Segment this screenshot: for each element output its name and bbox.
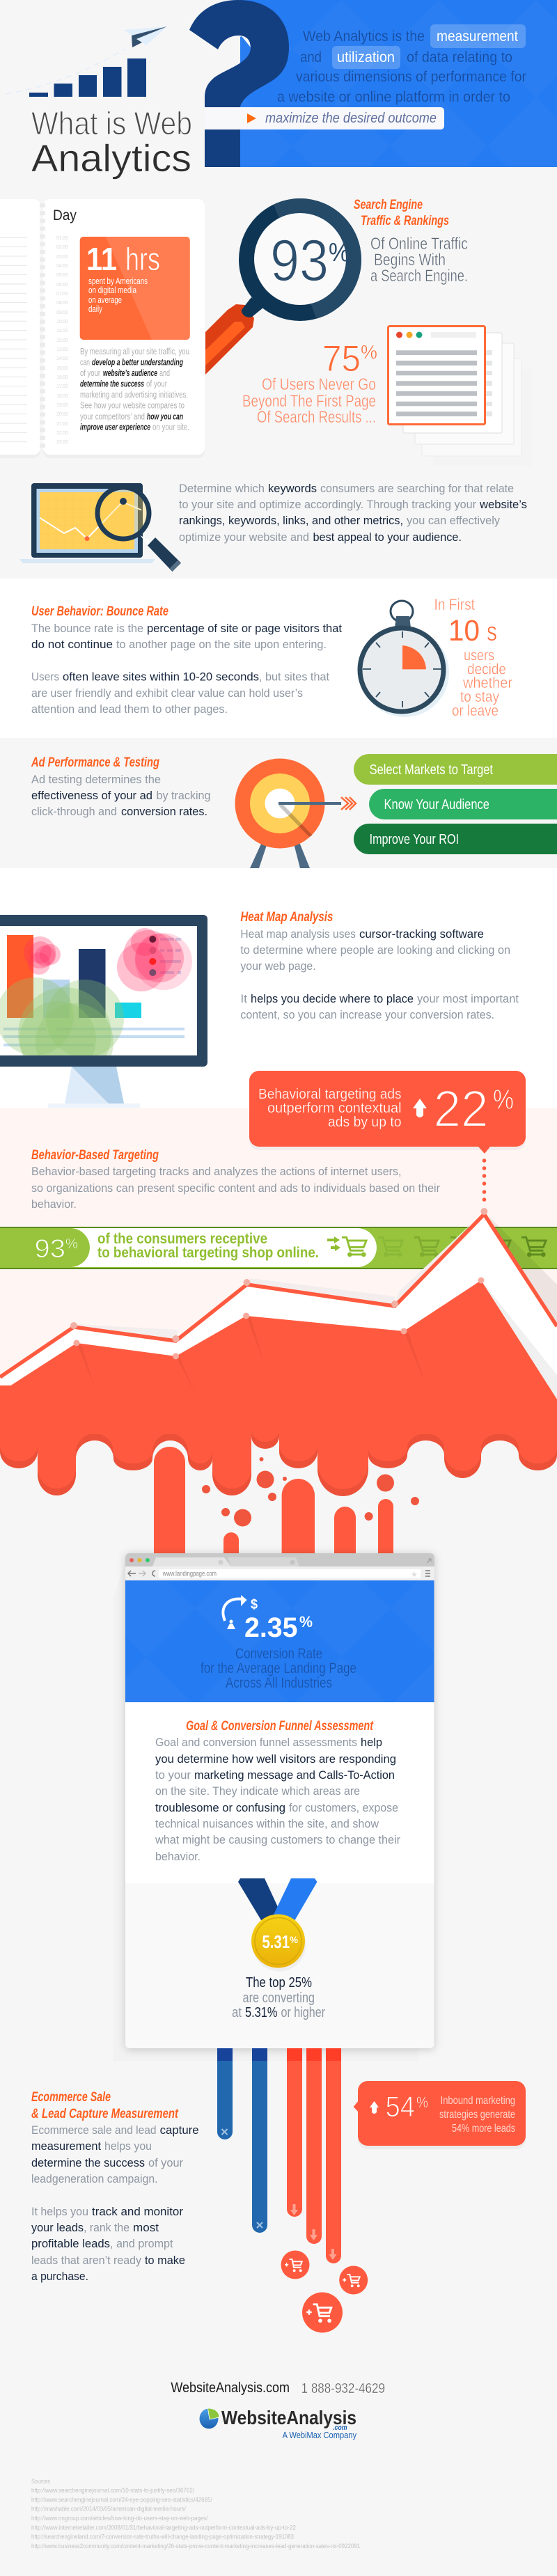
text: top 25 percent: 5.31% (245, 2005, 278, 2020)
callout: maximize the desired outcome (205, 107, 444, 129)
streams: blue lost leads (217, 2048, 267, 2233)
text: keywords: you can effectively (407, 514, 500, 527)
heading: search engine traffic and rankings: Search Engine (354, 198, 423, 212)
text block: measuring traffic: See how your website compares to (80, 401, 185, 411)
icon: cart with arrows (327, 1236, 366, 1257)
hour labels: 04:00 (56, 262, 68, 269)
stat: 75 percent: Of Users Never Go (262, 375, 376, 394)
heading: behavior targeting: Behavior-Based Targeting (31, 1148, 159, 1163)
icons: cart circles (281, 2250, 368, 2332)
browser chrome: www.landingpage.com (162, 1571, 217, 1578)
text block: measuring traffic: website’s audience (103, 368, 157, 378)
text block: measuring traffic: your competitors’ and (80, 411, 145, 421)
text block: measuring traffic: how you can (147, 411, 183, 421)
text block: measuring traffic (80, 347, 189, 432)
heading: search engine traffic and rankings: Traffic & Rankings (361, 214, 449, 228)
hour labels: 12:00 (56, 337, 68, 343)
logo: A WebiMax Company (283, 2430, 356, 2440)
chart drip shade (0, 1392, 557, 1496)
text: of online traffic: a Search Engine. (370, 267, 468, 285)
text: ad testing: Ad testing determines the (31, 773, 161, 786)
stat: 75 percent: Of Search Results ... (257, 408, 376, 427)
text block: measuring traffic: marketing and advertising initiatives. (80, 390, 188, 400)
panel: daily calendar (0, 199, 205, 458)
pill: select markets (354, 754, 557, 785)
definition text (277, 24, 526, 105)
panel: search engine traffic (205, 195, 533, 466)
definition text: utilization (337, 49, 395, 65)
stat: first 10 seconds: In First (434, 595, 476, 613)
icon: laptop with magnifier (19, 483, 181, 572)
heading: ad performance: Ad Performance & Testing (31, 755, 159, 770)
definition text: of data relating to (407, 49, 512, 65)
stat: first 10 seconds: to stay (460, 688, 499, 705)
text: conversion rate: Across All Industries (226, 1675, 332, 1691)
callout: behavioral targeting 22 percent: ads by up to (328, 1115, 401, 1130)
text: funnel assessment: you determine how well visitors are responding (155, 1752, 396, 1766)
pill: know your audience (369, 789, 557, 819)
text: ad testing: conversion rates. (121, 805, 207, 818)
hour labels: 07:00 (56, 290, 68, 297)
text: ecommerce: a purchase. (31, 2270, 88, 2283)
text: behavior targeting: Behavior-based targeting tracks and analyzes the actions of internet users, (31, 1165, 401, 1178)
logo: WebsiteAnalysis (221, 2407, 356, 2428)
sources: http://www.searchenginejournal.com/10-stats-to-justify-seo/36762/ (31, 2487, 194, 2495)
browser chrome: ★ (411, 1571, 418, 1579)
callout: behavioral targeting 22 percent: % (493, 1085, 514, 1115)
text: ecommerce: leads that aren’t ready (31, 2254, 141, 2267)
calendar right page (42, 199, 205, 458)
orange stat card: 11 hrs: hrs (125, 241, 160, 277)
icon: conversion arrow (223, 1595, 258, 1629)
text: ecommerce: It helps you (31, 2205, 88, 2218)
stat: 2.35 percent: % (299, 1613, 313, 1631)
text: bounce rate: The bounce rate is the (31, 622, 143, 635)
stat: first 10 seconds: s (487, 618, 497, 647)
dotted connector (483, 1159, 486, 1202)
banner: 93 percent of consumers: % (65, 1236, 78, 1252)
icon: medal (238, 1878, 317, 1972)
text: of online traffic: Begins With (374, 251, 446, 269)
text: conversion rate (201, 1646, 356, 1691)
hour labels: 19:00 (56, 402, 68, 408)
sources: http://www.searchenginejournal.com/24-eye-popping-seo-statistics/42665/ (31, 2496, 212, 2504)
callout: behavioral targeting 22 percent: 22 (433, 1080, 489, 1138)
sources: http://www.internetretailer.com/2008/01/31/behavioral-targeting-ads-outperform-contextual-ads-by-up-to-22 (31, 2524, 296, 2531)
text: funnel assessment: help (361, 1736, 382, 1749)
callout: behavioral targeting 22 percent: Behavioral targeting ads (258, 1087, 401, 1102)
orange stat card: 11 hrs: daily (88, 304, 103, 314)
text block: measuring traffic: develop a better understanding (92, 357, 183, 367)
text: top 25 percent: The top 25% (246, 1975, 312, 1990)
callout: inbound marketing 54 percent: 54 (386, 2090, 415, 2123)
panel: browser card (113, 1553, 434, 2061)
hour labels: 11:00 (56, 327, 68, 333)
title (31, 105, 192, 180)
hour labels: 10:00 (56, 318, 68, 324)
text: heat map: your most important (417, 992, 519, 1005)
sources: http://www.nngroup.com/articles/how-long-do-users-stay-on-web-pages/ (31, 2515, 208, 2522)
landing page blue panel (125, 1580, 434, 1702)
text: ad testing: by tracking (156, 789, 210, 802)
text block: measuring traffic: on your site. (152, 423, 189, 432)
icon: target with arrow (235, 759, 356, 868)
stat: 75 percent: 75 (322, 338, 361, 379)
callout: inbound marketing 54 percent: strategies generate (439, 2109, 515, 2121)
icon: magnifying glass (205, 195, 369, 375)
text: ecommerce: Ecommerce sale and lead (31, 2123, 156, 2137)
sources: Sources (31, 2478, 50, 2485)
chart shadows (74, 1215, 557, 1341)
chart red area (0, 1280, 557, 1434)
icon: stopwatch (360, 601, 449, 717)
icon: rising bar chart and paper plane (6, 26, 167, 97)
white content area (125, 1702, 434, 2048)
icons: faded carts (378, 1237, 546, 1257)
text: bounce rate: , but sites that (259, 670, 329, 684)
text: ecommerce: helps you (104, 2139, 152, 2153)
text: bounce rate: Users (31, 670, 59, 684)
text: top 25 percent: or higher (281, 2005, 325, 2020)
calendar right page: Day (53, 207, 77, 223)
text: ecommerce: leadgeneration campaign. (31, 2172, 157, 2185)
text: funnel assessment: technical nuisances within the site, and show (155, 1817, 379, 1830)
text: ecommerce: most (133, 2221, 159, 2234)
banner: 93 percent of consumers (0, 1227, 557, 1269)
text: ad testing: effectiveness of your ad (31, 789, 152, 802)
heading: ecommerce: & Lead Capture Measurement (31, 2107, 179, 2121)
text block: measuring traffic: determine the success (80, 379, 144, 389)
callout: maximize the desired outcome: maximize the desired outcome (265, 111, 437, 126)
text: funnel assessment: to your (155, 1768, 191, 1782)
panel: header (6, 0, 557, 180)
text: ecommerce: track and monitor (92, 2205, 183, 2218)
chart drips (0, 1385, 557, 1489)
text block: measuring traffic: of your (146, 379, 167, 389)
hour labels: 20:00 (56, 411, 68, 417)
text: ecommerce: your leads (31, 2221, 84, 2234)
text: bounce rate: percentage of site or page visitors that (147, 622, 342, 635)
text: keywords: to your site and optimize accordingly. Through tracking your (179, 498, 476, 511)
text block: measuring traffic: improve user experience (80, 423, 150, 432)
sources: http://www.business2community.com/content-marketing/26-stats-prove-content-marketing-increases-lead-generation-sales-roi-0922091 (31, 2543, 360, 2550)
icon: medal: 5.31 (262, 1931, 290, 1952)
orange stat card: 11 hrs: spent by Americans (88, 276, 148, 286)
text: funnel assessment: marketing message and Calls-To-Action (194, 1768, 395, 1782)
text: bounce rate: are user friendly and exhibit clear value can hold user’s (31, 686, 303, 700)
hour labels: 05:00 (56, 272, 68, 278)
text: bounce rate (31, 622, 342, 716)
text block: measuring traffic: By measuring all your site traffic, you (80, 347, 189, 356)
stat: 75 percent (242, 338, 377, 427)
text: bounce rate: attention and lead them to other pages. (31, 702, 228, 716)
definition text: various dimensions of performance for (296, 69, 526, 85)
text: of online traffic (370, 235, 468, 285)
banner: 93 percent of consumers: of the consumers receptive (97, 1231, 267, 1247)
callout: inbound marketing 54 percent: Inbound marketing (441, 2095, 515, 2107)
text: keywords: Determine which (179, 482, 265, 495)
hour labels: 17:00 (56, 383, 68, 389)
chart: rising line and dripping area (0, 1208, 557, 1553)
chart red line (0, 1214, 557, 1377)
sources: http://searchengineland.com/7-conversion-rate-truths-will-change-landing-page-optimization-strategy-191083 (31, 2534, 294, 2541)
chart dots lower (74, 1277, 485, 1359)
title: What is Web (31, 105, 192, 141)
text: ecommerce: , and prompt (110, 2237, 173, 2250)
contact line: 1 888-932-4629 (301, 2381, 385, 2396)
pill: select markets: Select Markets to Target (370, 762, 493, 778)
heading: ecommerce (31, 2090, 179, 2121)
icon: stacked result pages (389, 326, 533, 466)
text: keywords: best appeal to your audience. (313, 531, 462, 544)
hour labels: 03:00 (56, 253, 68, 260)
chart area creases (77, 1316, 425, 1392)
pill: know your audience: Know Your Audience (384, 797, 489, 812)
text: conversion rate: for the Average Landing Page (201, 1660, 356, 1676)
stat: 75 percent: Beyond The First Page (242, 392, 376, 411)
chart white band (0, 1214, 557, 1420)
text: behavior targeting: so organizations can present specific content and ads to individuals based on their (31, 1181, 440, 1195)
text: funnel assessment: behavior. (155, 1850, 201, 1863)
text: behavior targeting: behavior. (31, 1197, 77, 1211)
chart dots upper (70, 1208, 487, 1342)
stat: 93 percent: % (329, 238, 350, 267)
rising columns (154, 1447, 393, 1553)
icon: question mark (189, 0, 289, 167)
text: ecommerce: to make (145, 2254, 185, 2267)
stat: first 10 seconds: users (464, 647, 494, 664)
hour labels: 21:00 (56, 421, 68, 427)
text block: measuring traffic: can (80, 357, 90, 367)
heading: heat map: Heat Map Analysis (240, 910, 333, 925)
definition text: measurement (437, 29, 518, 45)
callout: behavioral targeting 22 percent (249, 1071, 526, 1154)
text: ad testing: click-through and (31, 805, 117, 818)
text: heat map: cursor-tracking software (359, 927, 484, 941)
text: of online traffic: Of Online Traffic (370, 235, 468, 253)
panel: footer (31, 2380, 385, 2550)
callout: inbound marketing 54 percent: % (416, 2094, 428, 2111)
panel: heat map analysis (0, 910, 519, 1108)
droplets (202, 1457, 419, 1526)
callout: behavioral targeting 22 percent: outperform contextual (267, 1101, 401, 1116)
pill: improve your roi: Improve Your ROI (370, 832, 459, 847)
text: ecommerce: determine the success (31, 2156, 145, 2169)
text: keywords: keywords (268, 482, 317, 495)
text: keywords: consumers are searching for that relate (320, 482, 514, 495)
definition text: a website or online platform in order to (277, 89, 510, 105)
banner: 93 percent of consumers: 93 (35, 1234, 65, 1263)
text: keywords (179, 482, 527, 544)
panel: ecommerce and lead capture (31, 2048, 526, 2332)
text: ecommerce: of your (148, 2156, 183, 2169)
hour labels: 02:00 (56, 244, 68, 250)
stat: first 10 seconds: whether (462, 674, 512, 691)
hour labels: 13:00 (56, 346, 68, 352)
stat: first 10 seconds (434, 595, 512, 719)
streams: red converted leads (287, 2048, 341, 2263)
text: keywords: optimize your website and (179, 531, 309, 544)
text block: measuring traffic: and (159, 368, 170, 378)
contact line (171, 2380, 385, 2396)
title: Analytics (31, 136, 191, 180)
card shadow (113, 1554, 434, 2061)
hour labels: 18:00 (56, 393, 68, 399)
text: heat map (240, 927, 519, 1021)
heading: search engine traffic and rankings (354, 198, 449, 228)
text: heat map: your web page. (240, 959, 316, 973)
sources: http://mashable.com/2014/03/05/american-digital-media-hours/ (31, 2506, 186, 2513)
stat: 2.35 percent: 2.35 (244, 1612, 298, 1643)
heading: user behavior: User Behavior: Bounce Rate (31, 604, 168, 619)
chart grey edge (481, 1280, 557, 1399)
heading: goal and conversion: Goal & Conversion Funnel Assessment (186, 1719, 374, 1734)
text block: measuring traffic: of your (80, 368, 100, 378)
icon: monitor with heat map (0, 915, 207, 1108)
hour labels: 14:00 (56, 355, 68, 361)
hour labels: 01:00 (56, 235, 68, 241)
text: funnel assessment: what might be causing customers to change their (155, 1833, 400, 1846)
logo: .com (333, 2424, 347, 2432)
text: top 25 percent: are converting (242, 1990, 315, 2006)
icon: medal: % (290, 1934, 299, 1945)
stat: 93 percent: 93 (270, 228, 329, 293)
calendar left page (0, 199, 40, 458)
panel: ad performance (31, 754, 557, 868)
panel: behavior-based targeting (0, 1071, 557, 1269)
text: ecommerce: , rank the (84, 2221, 130, 2234)
text: top 25 percent (232, 1975, 325, 2020)
hour labels: 23:00 (56, 439, 68, 445)
hour labels: 09:00 (56, 309, 68, 315)
definition text: and (300, 49, 322, 65)
icon: conversion arrow: $ (251, 1597, 258, 1612)
pill: improve your roi (354, 824, 557, 854)
text: heat map: Heat map analysis uses (240, 927, 356, 941)
callout: inbound marketing 54 percent (354, 2081, 526, 2149)
definition text: Web Analytics is the (303, 29, 425, 45)
blue definition panel (240, 0, 557, 167)
callout: inbound marketing 54 percent: 54% more leads (452, 2123, 515, 2135)
stat: first 10 seconds: 10 (448, 614, 480, 647)
hour labels (56, 235, 68, 445)
text: heat map: helps you decide where to place (251, 992, 414, 1005)
text: ecommerce: measurement (31, 2139, 101, 2153)
hour labels: 15:00 (56, 365, 68, 371)
text: ecommerce: capture (160, 2123, 199, 2137)
panel: keywords (19, 482, 527, 572)
stat: first 10 seconds: decide (467, 661, 506, 678)
banner: 93 percent of consumers: to behavioral targeting shop online. (97, 1245, 319, 1261)
text: funnel assessment: Goal and conversion funnel assessments (155, 1736, 357, 1749)
text: bounce rate: do not continue (31, 638, 113, 651)
orange stat card: 11 hrs (80, 237, 190, 340)
browser chrome (125, 1553, 434, 1580)
text: conversion rate: Conversion Rate (235, 1646, 322, 1662)
list: three green pills (354, 754, 557, 854)
text: funnel assessment: troublesome or confusing (155, 1801, 285, 1814)
contact line: WebsiteAnalysis.com (171, 2380, 290, 2396)
orange stat card: 11 hrs: on average (88, 295, 122, 305)
text: top 25 percent: at (232, 2005, 242, 2020)
text: funnel assessment: on the site. They indicate which areas are (155, 1784, 360, 1798)
text: keywords: website’s (479, 498, 527, 511)
text: keywords: rankings, keywords, links, and other metrics, (179, 514, 403, 527)
hour labels: 06:00 (56, 281, 68, 288)
text: heat map: to determine where people are looking and clicking on (240, 943, 510, 957)
text: heat map: It (240, 992, 247, 1005)
stat: first 10 seconds: or leave (452, 702, 499, 719)
orange stat card: 11 hrs: 11 (86, 241, 117, 277)
logo (199, 2407, 356, 2440)
text: bounce rate: to another page on the site upon entering. (116, 638, 327, 651)
heading: ecommerce: Ecommerce Sale (31, 2090, 111, 2105)
text: ad testing (31, 773, 210, 818)
hour labels: 16:00 (56, 374, 68, 380)
orange stat card: 11 hrs: on digital media (88, 285, 136, 295)
sources (31, 2478, 360, 2550)
text: behavior targeting (31, 1165, 440, 1211)
text: funnel assessment: for customers, expose (289, 1801, 398, 1814)
stat: 75 percent: % (361, 341, 377, 363)
text: ecommerce (31, 2123, 199, 2283)
hour labels: 08:00 (56, 299, 68, 306)
text: bounce rate: often leave sites within 10-20 seconds (63, 670, 259, 684)
text: heat map: content, so you can increase your conversion rates. (240, 1008, 494, 1021)
panel: user behavior bounce rate (31, 595, 512, 719)
text: ecommerce: profitable leads (31, 2237, 110, 2250)
hour labels: 22:00 (56, 430, 68, 436)
text: funnel assessment (155, 1736, 400, 1863)
